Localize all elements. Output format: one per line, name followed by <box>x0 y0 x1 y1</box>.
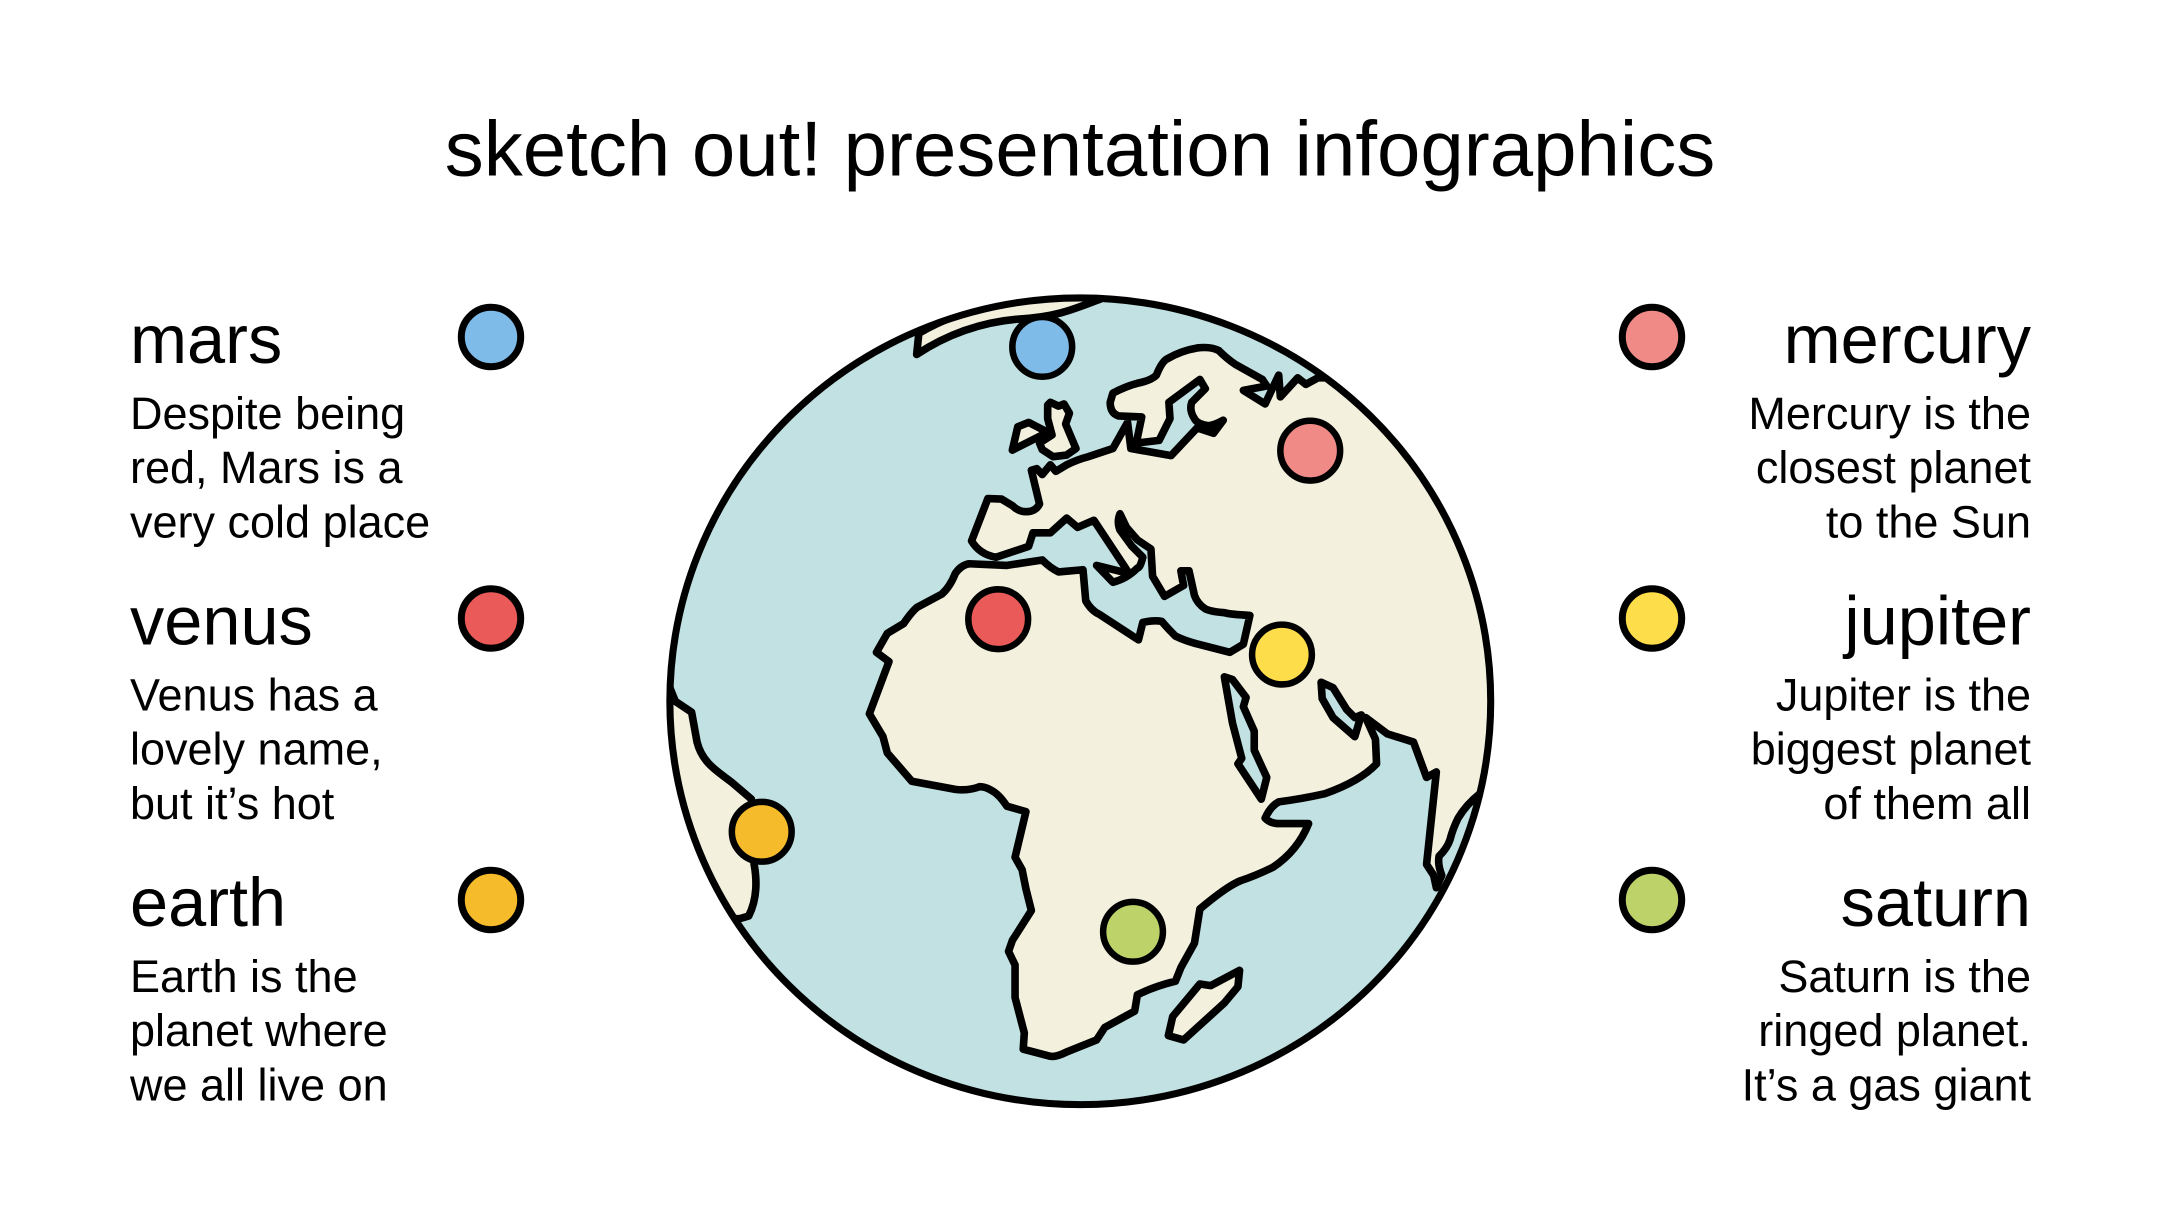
heading: venus: venus <box>130 582 313 660</box>
text: mercury description: to the Sun <box>1826 496 2031 548</box>
text: mercury description: closest planet <box>1756 442 2031 493</box>
title: sketch out! presentation infographics <box>445 104 1715 192</box>
ocean <box>670 298 1491 1105</box>
globe outline <box>670 298 1491 1105</box>
text: mars description: red, Mars is a <box>130 442 404 493</box>
text: earth description: we all live on <box>129 1060 388 1110</box>
text: venus description: lovely name, <box>130 724 383 774</box>
text: mercury description: Mercury is the <box>1748 388 2031 439</box>
land: madagascar <box>1168 970 1240 1040</box>
icon: yellow dot <box>1622 589 1682 648</box>
marker: jupiter <box>1252 625 1312 684</box>
globe map <box>648 295 1556 1105</box>
land: ireland <box>1012 422 1048 450</box>
panel: mercury <box>1622 301 2032 548</box>
heading: mars: mars <box>130 301 282 378</box>
water: persian gulf <box>1321 682 1361 737</box>
text: saturn description: It’s a gas giant <box>1742 1060 2031 1110</box>
land: south america <box>673 686 760 922</box>
text: jupiter description: Jupiter is the <box>1776 670 2031 720</box>
text: venus description: Venus has a <box>130 670 379 720</box>
text: earth description: Earth is the <box>130 951 358 1002</box>
icon: red dot <box>461 589 521 648</box>
text: venus description: but it’s hot <box>130 778 335 829</box>
icon: orange dot <box>461 870 521 930</box>
panel: mars <box>130 301 521 548</box>
text: mars description: very cold place <box>130 496 430 548</box>
land: eurasia and africa <box>869 348 1556 1056</box>
marker: earth <box>732 802 792 862</box>
text: jupiter description: biggest planet <box>1751 724 2031 774</box>
marker: mercury <box>1280 421 1340 481</box>
water: red sea <box>1224 677 1267 799</box>
heading: mercury: mercury <box>1784 301 2032 378</box>
land: greenland <box>917 295 1100 354</box>
marker: venus <box>968 589 1028 649</box>
panel: jupiter <box>1622 582 2031 829</box>
heading: saturn: saturn <box>1841 864 2031 941</box>
icon: green dot <box>1622 870 1682 930</box>
heading: jupiter: jupiter <box>1842 582 2031 660</box>
text: saturn description: Saturn is the <box>1778 951 2031 1002</box>
heading: earth: earth <box>130 864 286 941</box>
panel: earth <box>129 864 521 1110</box>
marker: saturn <box>1103 902 1163 962</box>
icon: pink dot <box>1622 307 1682 367</box>
panel: saturn <box>1622 864 2031 1110</box>
text: mars description: Despite being <box>130 388 405 439</box>
icon: blue dot <box>461 307 521 367</box>
panel: venus <box>130 582 521 829</box>
text: saturn description: ringed planet. <box>1758 1005 2031 1056</box>
text: earth description: planet where <box>130 1005 388 1056</box>
land masses <box>673 302 1488 1060</box>
marker: mars <box>1012 317 1072 377</box>
land: britain <box>1040 402 1076 457</box>
text: jupiter description: of them all <box>1823 778 2031 829</box>
